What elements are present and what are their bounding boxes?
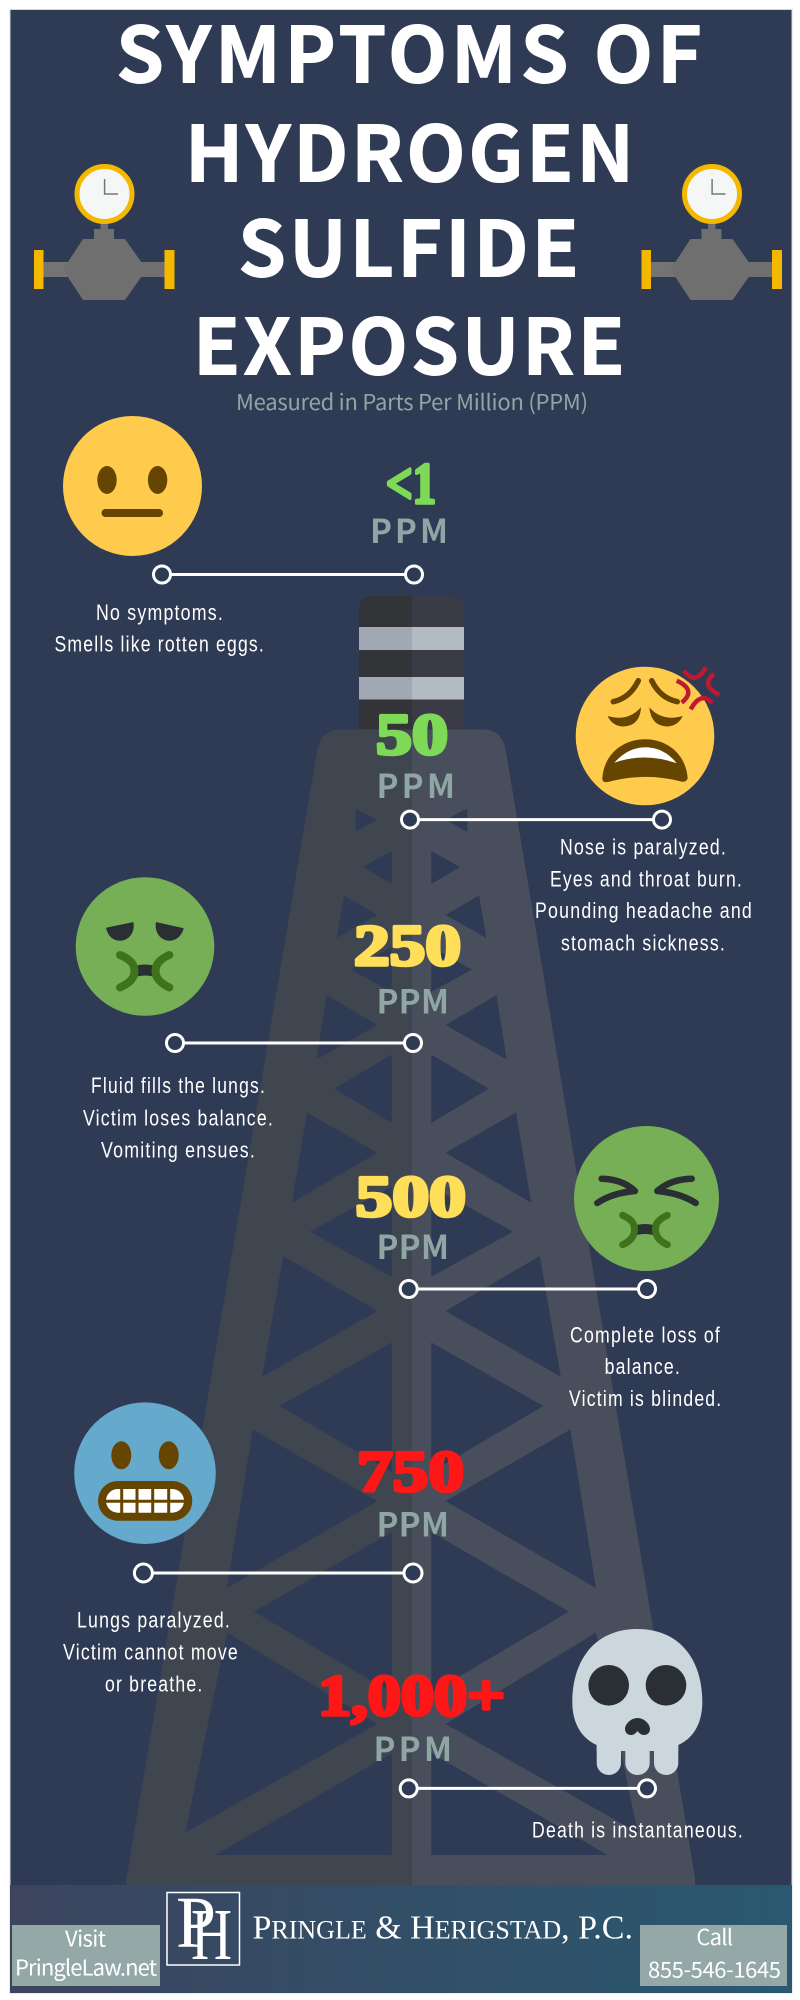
company name: PRINGLE & HERIGSTAD, P.C. [252, 1909, 633, 1946]
text: fluid fills lungs symptoms: Vomiting ensues. [101, 1138, 256, 1163]
icon: squinting nauseated green face [574, 1126, 719, 1271]
level: 250 PPM: 250 [354, 913, 461, 978]
connector: 50 PPM [402, 811, 670, 828]
text: no symptoms [54, 600, 265, 656]
button: call phone number [640, 1920, 787, 1986]
level: less than 1 PPM: <1 [386, 451, 436, 516]
connector: 250 PPM [166, 1034, 422, 1052]
text: nose paralyzed symptoms [535, 834, 753, 956]
button: visit website: PringleLaw.net [15, 1950, 157, 1982]
subtitle: Measured in Parts Per Million (PPM) [236, 385, 588, 417]
level: 1,000+ PPM: PPM [374, 1723, 452, 1771]
connector: 500 PPM [400, 1280, 656, 1298]
level: 250 PPM: PPM [376, 976, 449, 1024]
text: lungs paralyzed symptoms: Victim cannot move [63, 1639, 239, 1664]
button: visit website: Visit [65, 1921, 106, 1953]
icon: weary face with anger mark [576, 667, 719, 805]
icon: cold blue grimacing face [74, 1402, 216, 1544]
icon: right pressure gauge [642, 166, 782, 300]
connector: 750 PPM [134, 1564, 422, 1582]
logo: PH monogram: H [191, 1894, 232, 1975]
level: 500 PPM: PPM [376, 1221, 449, 1269]
text: complete loss of balance: balance. [605, 1354, 681, 1379]
text: complete loss of balance [569, 1322, 722, 1411]
level: less than 1 PPM [370, 451, 448, 553]
text: fluid fills lungs symptoms [83, 1073, 274, 1163]
logo: PH monogram [167, 1882, 240, 1975]
level: 1,000+ PPM: 1,000+ [318, 1663, 505, 1728]
oil derrick tower background [126, 730, 695, 1885]
text: nose paralyzed symptoms: stomach sickness. [561, 930, 726, 956]
title: HYDROGEN [185, 94, 634, 204]
button: call phone number: Call [696, 1920, 733, 1952]
button: visit website [12, 1921, 160, 1986]
text: fluid fills lungs symptoms: Fluid fills the lungs. [91, 1073, 266, 1098]
text: nose paralyzed symptoms: Nose is paralyzed. [560, 834, 727, 860]
button: call phone number: 855-546-1645 [648, 1953, 781, 1985]
text: fluid fills lungs symptoms: Victim loses balance. [83, 1106, 274, 1130]
icon: skull [572, 1629, 702, 1775]
level: 250 PPM [354, 913, 461, 1024]
chimney on top of derrick [359, 596, 464, 730]
level: 500 PPM: 500 [356, 1164, 466, 1229]
level: 750 PPM: 750 [357, 1439, 464, 1504]
icon: nauseated green face [76, 877, 214, 1016]
connector: 1,000+ PPM [400, 1780, 656, 1797]
text: lungs paralyzed symptoms [63, 1608, 239, 1696]
logo: PH monogram: P [176, 1882, 216, 1963]
title: EXPOSURE [193, 286, 625, 398]
icon: left pressure gauge [34, 166, 174, 300]
panel: footer bar [10, 1882, 792, 1993]
level: 500 PPM [356, 1164, 466, 1269]
icon: neutral face [63, 416, 202, 556]
level: 50 PPM: 50 [376, 702, 448, 767]
level: 50 PPM: PPM [376, 760, 455, 808]
text: death is instantaneous: Death is instantaneous. [532, 1818, 744, 1842]
text: complete loss of balance: Victim is blinded. [569, 1386, 722, 1411]
text: lungs paralyzed symptoms: Lungs paralyzed. [77, 1608, 231, 1633]
text: complete loss of balance: Complete loss of [570, 1322, 721, 1347]
title [116, 0, 702, 398]
level: less than 1 PPM: PPM [370, 505, 448, 553]
level: 750 PPM [357, 1439, 464, 1547]
text: no symptoms: No symptoms. [96, 600, 224, 625]
text: no symptoms: Smells like rotten eggs. [54, 632, 265, 656]
level: 750 PPM: PPM [376, 1499, 449, 1547]
text: nose paralyzed symptoms: Pounding headache and [535, 898, 753, 923]
level: 1,000+ PPM [318, 1663, 505, 1771]
title: SULFIDE [238, 188, 579, 300]
text: nose paralyzed symptoms: Eyes and throat burn. [550, 867, 743, 892]
level: 50 PPM [376, 702, 455, 808]
connector: less than 1 PPM [154, 566, 422, 583]
text: lungs paralyzed symptoms: or breathe. [105, 1672, 204, 1696]
